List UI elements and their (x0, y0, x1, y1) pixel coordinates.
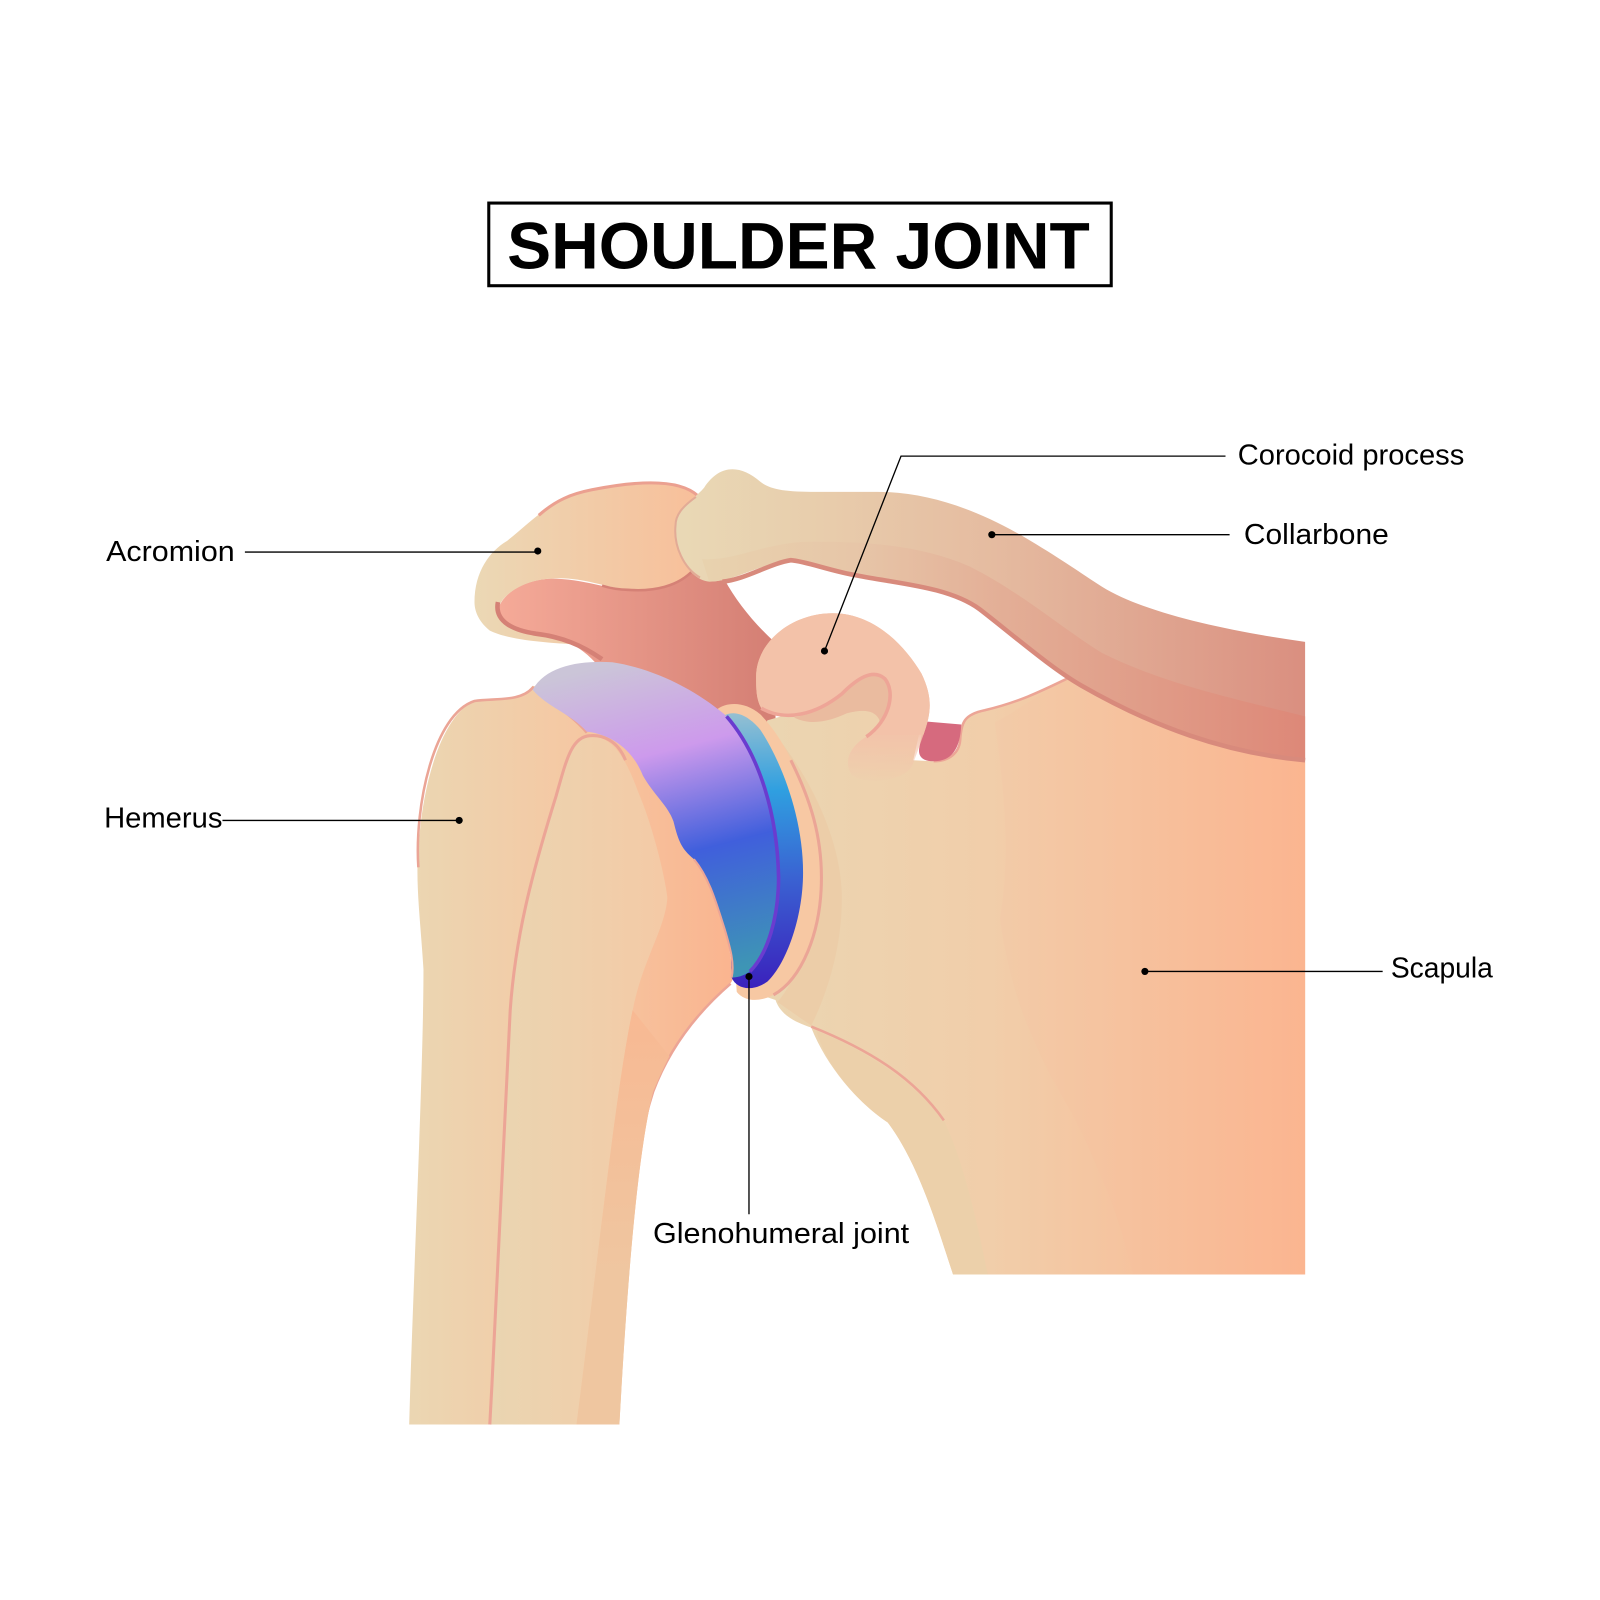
scapula right shading (995, 677, 1305, 1274)
glenoid labrum (717, 704, 821, 1000)
label: Glenohumeral joint (653, 973, 909, 1250)
scapula rim line (811, 1027, 944, 1120)
notch (919, 721, 961, 761)
coracoid fold inner (794, 674, 890, 737)
humerus inner shaft (490, 736, 667, 1424)
purple inner edge (727, 716, 779, 971)
shaft lower strip (577, 1010, 669, 1424)
label: Hemerus (104, 803, 463, 835)
acromion top edge (539, 483, 698, 515)
label: Collarbone (988, 519, 1389, 551)
purple cartilage (533, 662, 779, 978)
coracoid process (756, 613, 930, 781)
label: Corocoid process: Corocoid process (1238, 439, 1464, 471)
label: Scapula: Scapula (1391, 953, 1493, 985)
label: Scapula (1141, 953, 1493, 985)
ligament (497, 567, 776, 745)
label: Acromion (106, 536, 541, 568)
label: Hemerus: Hemerus (104, 803, 222, 835)
collarbone lower band (702, 542, 1305, 760)
collarbone knob edge (675, 497, 700, 578)
glenoid shade (776, 735, 842, 1026)
label: Collarbone: Collarbone (1244, 519, 1389, 551)
label: Acromion: Acromion (106, 536, 235, 568)
scapula top edge line (934, 677, 1071, 761)
collarbone bottom edge (722, 560, 1305, 760)
shaft edge (490, 736, 626, 1424)
humerus outer edge (418, 688, 587, 867)
title: SHOULDER JOINT (507, 209, 1090, 283)
humerus lower edge (638, 984, 731, 1158)
purple left edge (694, 859, 733, 978)
scapula lower shading (816, 1031, 988, 1274)
collarbone (675, 469, 1305, 760)
label: Glenohumeral joint: Glenohumeral joint (653, 1218, 909, 1250)
acromion (474, 483, 698, 659)
acromion under-edge (497, 602, 602, 659)
labrum edge (773, 760, 821, 995)
label: Corocoid process (821, 439, 1464, 655)
humerus (409, 686, 733, 1424)
coracoid fold line (761, 674, 890, 737)
blue crescent (724, 713, 803, 988)
scapula (745, 677, 1305, 1274)
